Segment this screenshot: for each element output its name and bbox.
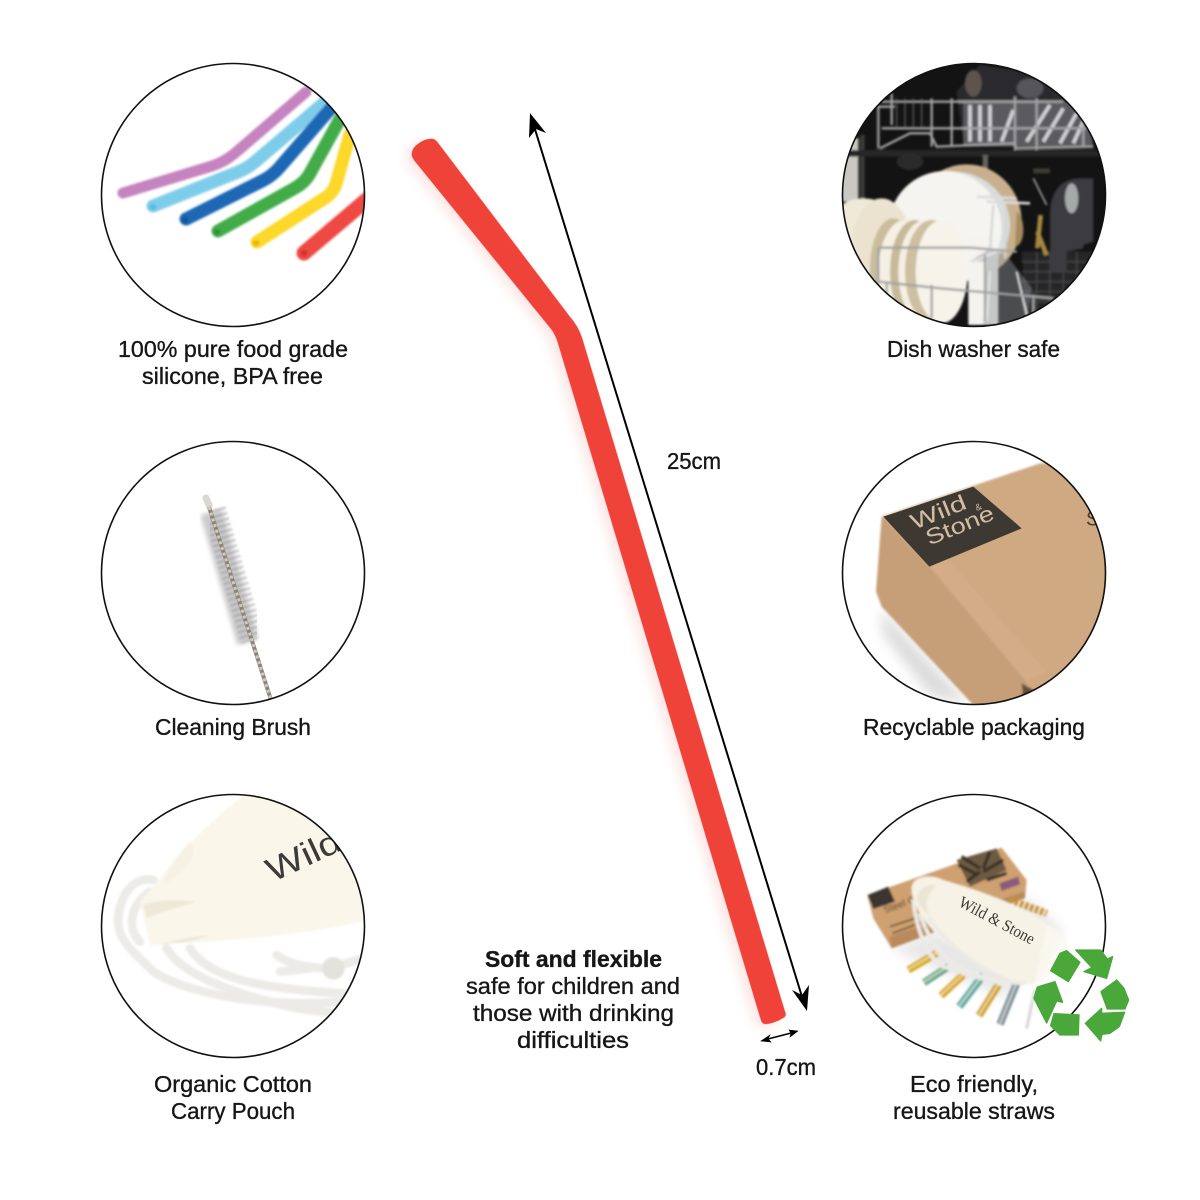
- label: organic cotton carry pouch: Carry Pouch: [171, 1098, 295, 1124]
- label: food grade silicone: silicone, BPA free: [142, 363, 323, 389]
- box print mark: S: [1086, 509, 1099, 531]
- label: cleaning brush: Cleaning Brush: [155, 714, 311, 740]
- icon: green recycle symbol: [1034, 950, 1129, 1041]
- text block: soft and flexible: safe for children and: [466, 973, 680, 999]
- text block: soft and flexible: [466, 946, 680, 1053]
- label: dish washer safe: Dish washer safe: [887, 336, 1060, 362]
- label: food grade silicone: 100% pure food grade: [118, 336, 348, 362]
- label: recyclable packaging: Recyclable packaging: [863, 714, 1085, 740]
- text block: soft and flexible: those with drinking: [473, 1000, 674, 1026]
- arrow: 25cm length dimension: [529, 113, 809, 1011]
- label: eco friendly reusable straws: reusable straws: [893, 1098, 1055, 1124]
- label: organic cotton carry pouch: [154, 1071, 312, 1124]
- photo: steel straw set with pouch: [867, 848, 1067, 1028]
- circle outline: [102, 442, 364, 704]
- photo: kraft box: [874, 462, 1105, 704]
- brand text on pouch: Wild: [260, 823, 347, 890]
- panel: eco friendly set: [842, 794, 1129, 1124]
- cutlery basket: [1022, 250, 1092, 314]
- racks: [877, 93, 1093, 322]
- photo: dishwasher interior: [843, 64, 1105, 326]
- photo: cotton pouch with cords: [118, 795, 377, 1015]
- panel: recyclable packaging: [842, 442, 1130, 740]
- white plate: [888, 171, 1002, 286]
- circle outline: [102, 794, 364, 1058]
- brand text on pouch: Wild & Stone: [956, 892, 1038, 948]
- photo: cleaning brush: [206, 498, 271, 700]
- panel: organic cotton pouch: [102, 794, 377, 1124]
- photo: kraft box: Wild: [906, 490, 970, 535]
- panel: cleaning brush: [102, 442, 364, 740]
- label: food grade silicone: [118, 336, 348, 389]
- left stack: [844, 196, 875, 242]
- panel: coloured silicone straws: [102, 64, 370, 389]
- label: 25cm: 25cm: [667, 448, 721, 474]
- brand label: [883, 487, 1022, 567]
- label: eco friendly reusable straws: [893, 1071, 1055, 1124]
- text block: soft and flexible: difficulties: [517, 1027, 629, 1053]
- label: eco friendly reusable straws: Eco friendly,: [910, 1071, 1038, 1097]
- circle outline: [842, 442, 1106, 704]
- kraft box: [867, 848, 1027, 948]
- label: organic cotton carry pouch: Organic Cotton: [154, 1071, 312, 1097]
- label: 0.7cm: 0.7cm: [756, 1054, 816, 1080]
- circle outline: [102, 64, 364, 326]
- cotton pouch: [912, 877, 1054, 985]
- steel straws: [908, 900, 1047, 1024]
- panel: dishwasher: [842, 62, 1106, 358]
- text block: soft and flexible: Soft and flexible: [485, 946, 662, 972]
- back plate: [912, 164, 1022, 279]
- photo: kraft box: Stone: [922, 500, 998, 550]
- photo: kraft box: &: [974, 501, 984, 513]
- photo: six coloured straws: [123, 92, 370, 256]
- wine glass: [970, 248, 1032, 325]
- infographic canvas: [100, 62, 1130, 1124]
- circle outline: [842, 64, 1106, 326]
- circle outline: [842, 794, 1106, 1058]
- photo: steel straw set with pouch: Steel Ca: [882, 893, 922, 916]
- main red bent straw: [406, 139, 786, 1027]
- arrow: 0.7cm width dimension: [761, 1030, 798, 1042]
